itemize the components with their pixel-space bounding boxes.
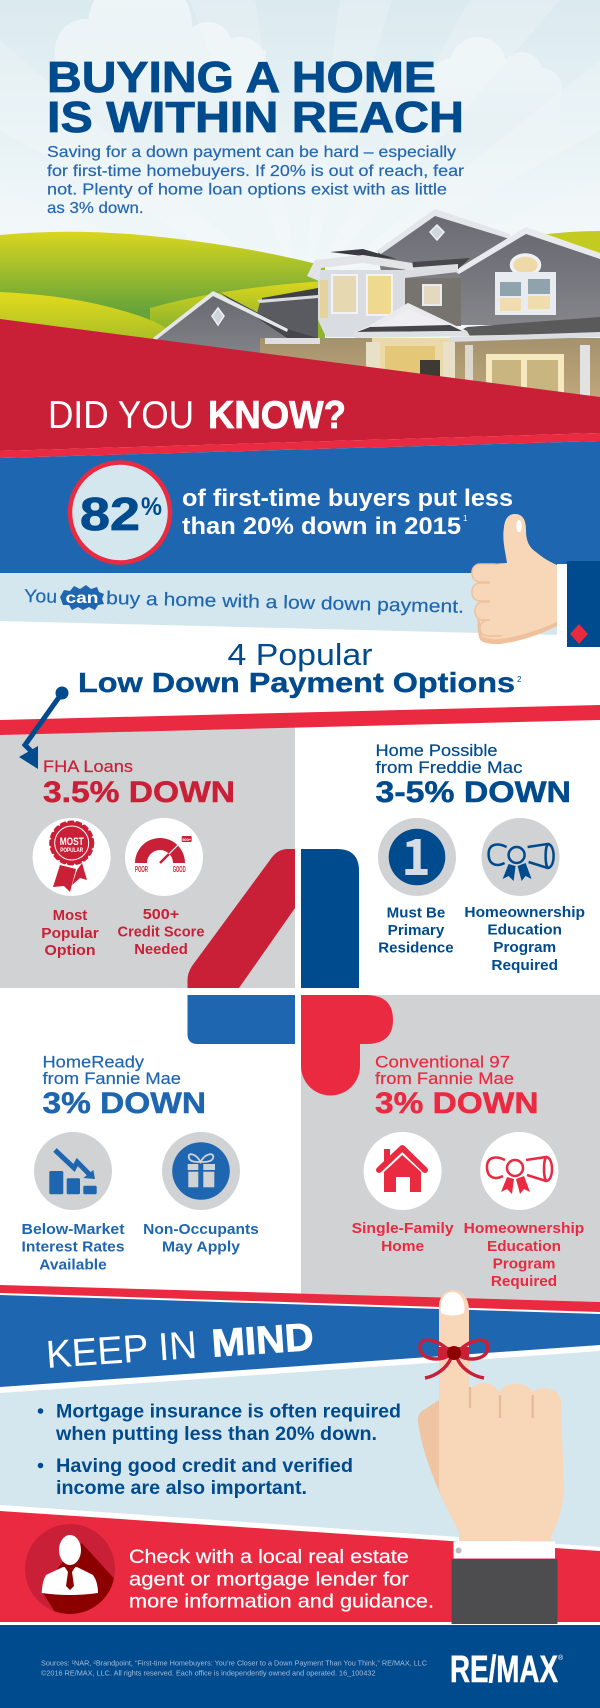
small window [423,285,441,305]
sleeve [567,561,600,647]
intro text: not. Plenty of home loan options exist with as little [47,182,447,198]
footer band [0,1625,600,1708]
callout text: agent or mortgage lender for [129,1570,409,1591]
label: 500+ credit score needed: Credit Score [118,924,204,940]
tagline text: You [24,585,57,607]
RE/MAX logo: ® [558,1654,564,1662]
label: homeownership education: Required [491,957,558,974]
red banner shape [0,319,600,451]
clouds [55,0,560,80]
callout text: more information and guidance. [129,1592,434,1613]
intro text: as 3% down. [47,200,144,217]
bullet list: Having good credit and verified [56,1456,353,1477]
label: single-family home: Single-Family [352,1220,454,1237]
label: homeownership education: Homeownership [464,904,585,921]
stat circle: 82%: 82 [80,488,140,540]
porch roof [450,317,600,336]
panel: home possible [376,741,585,974]
panel: home possible: 3-5% DOWN [376,776,571,809]
hills [0,231,600,345]
finger lobes [472,564,506,636]
stat circle: 82% [70,462,170,562]
label: homeownership education [464,1220,584,1290]
bullet list [38,1402,401,1499]
RE/MAX logo: RE/MAX [450,1649,558,1691]
label: homeownership education: Program [493,939,556,956]
label: 500+ credit score needed: Needed [134,941,188,958]
panel: homeready: from Fannie Mae [42,1069,181,1088]
left wing [250,288,318,340]
icon: falling rates chart [34,1132,112,1210]
label: single-family home [352,1220,454,1255]
hand shadow [477,570,557,644]
intro text: for first-time homebuyers. If 20% is out of reach, fear [47,163,465,180]
icon: credit score gauge: POOR [135,865,148,874]
footer sources text: ©2016 RE/MAX, LLC. All rights reserved. Each office is independently owned and operated. 16_100432 [41,1668,376,1678]
keep in mind section [0,1285,600,1625]
icon: number one [378,818,456,896]
can burst: can [66,590,98,607]
panel: homeready [22,1052,259,1273]
label: most popular option [41,907,99,959]
label: single-family home: Home [381,1238,424,1255]
cuff [557,564,567,639]
label: homeownership education: Program [493,1256,555,1273]
did you know banner [0,319,600,458]
heading: Home Possible [376,741,498,760]
panel: FHA loans: 3.5% DOWN [43,776,235,809]
thumb highlight [516,520,522,532]
label: must be primary residence [378,904,454,956]
label: must be primary residence: Primary [388,922,445,939]
label: below-market interest rates: Available [39,1256,107,1273]
icon: credit score gauge: 500+ [182,837,192,842]
title: IS WITHIN REACH [47,93,464,142]
callout text [129,1547,434,1613]
thumb shade [418,1400,480,1541]
label: must be primary residence: Must Be [387,904,445,922]
panel: conventional 97: 3% DOWN [375,1087,538,1120]
icon: gift [162,1132,240,1210]
icon: diploma [482,818,560,896]
label: most popular option: Option [44,942,96,959]
heading: keep in mind [45,1316,315,1377]
footer sources text [41,1658,428,1678]
icon: diploma [480,1132,558,1210]
label: homeownership education: Required [491,1273,557,1290]
label: non-occupants may apply: May Apply [162,1239,241,1256]
label: non-occupants may apply [143,1221,259,1256]
icon: most popular ribbon: POPULAR [60,848,84,854]
arrow pointing to FHA [19,686,68,769]
lower left gable [158,296,290,360]
footer sources text: Sources: ¹NAR, ²Brandpoint, “First-time Homebuyers: You’re Closer to a Down Payment Than You Think,” RE/MAX, LLC [41,1658,428,1668]
panel: conventional background [301,995,600,1305]
section heading: 4 popular options: 4 Popular [228,638,372,672]
panel: FHA loans [33,757,235,959]
label: 500+ credit score needed [118,906,204,958]
arched window [495,255,556,315]
tagline text: buy a home with a low down payment. [106,587,464,617]
can burst [60,585,104,610]
icon: number one: 1 [401,818,431,890]
section heading: 4 popular options: Low Down Payment Options [78,667,515,698]
center wall [405,278,461,326]
icon: single-family house [364,1132,442,1210]
bullet list: Mortgage insurance is often required [56,1402,401,1422]
label: homeownership education [464,904,585,974]
label: below-market interest rates [22,1221,124,1273]
section heading: 4 popular options: 2 [517,675,522,684]
heading: HomeReady [42,1052,145,1072]
stat text: of first-time buyers put less [182,485,513,512]
knuckle lines [470,1387,533,1418]
cuff [454,1542,555,1558]
stat text [182,485,513,540]
label: below-market interest rates: Below-Market [22,1221,124,1238]
light blue tagline band [0,573,600,636]
icon: agent silhouette [25,1524,115,1614]
blue statistic band [0,441,600,573]
background bands [0,1285,600,1625]
icon: most popular ribbon: MOST [60,836,84,848]
upper gable [378,212,520,300]
heading: did you know: DID YOU [48,394,194,437]
thumbs up hand [472,514,600,647]
heading: keep in mind: KEEP IN [45,1324,198,1377]
sleeve [452,1559,558,1624]
section heading: 4 popular options [78,638,522,698]
heading: keep in mind: MIND [210,1316,315,1366]
intro text: Saving for a down payment can be hard – especially [47,144,456,161]
fingernail [441,1292,464,1316]
heading: FHA Loans [43,757,133,776]
diamond [570,624,588,644]
panel: homeready: 3% DOWN [42,1087,206,1120]
title: BUYING A HOME [47,53,436,102]
cuff button [456,1548,462,1554]
tagline text [24,585,464,617]
label: homeownership education: Education [487,1238,561,1255]
hand [439,1290,564,1541]
label: most popular option: Most [53,907,87,924]
entry and porch [372,338,450,403]
bright red stripe [0,433,600,458]
label: must be primary residence: Residence [378,940,454,956]
bay window [318,270,405,337]
label: 500+ credit score needed: 500+ [143,906,179,923]
hero background: sky [0,0,600,340]
red divider stripe [0,705,600,735]
panel: home possible: from Freddie Mac [376,758,523,777]
panel: FHA background [0,725,295,988]
bullet list: when putting less than 20% down. [55,1424,377,1445]
intro text [47,144,465,217]
stat text: than 20% down in 2015 [182,513,461,540]
large number 4 logo [188,849,393,1096]
heading: Conventional 97 [375,1052,510,1072]
stat text: 1 [463,514,468,523]
ribbon bow [420,1340,488,1378]
panel: conventional 97: from Fannie Mae [375,1069,514,1088]
lower storey [260,338,600,410]
did you know banner: KNOW? [208,394,346,437]
hand [476,514,557,639]
label: non-occupants may apply: Non-Occupants [143,1221,259,1238]
right gable wall [458,232,600,325]
icon: most popular ribbon [33,818,111,896]
callout text: Check with a local real estate [129,1547,409,1568]
stat circle: 82%: % [141,493,162,521]
icon: credit score gauge [125,818,203,896]
title [47,53,464,142]
pointing hand with ribbon [418,1290,564,1624]
panel: conventional 97 [352,1052,584,1290]
bullet list: income are also important. [56,1478,307,1499]
label: homeownership education: Homeownership [464,1220,584,1237]
house photo illustration [153,209,600,410]
icon: credit score gauge: GOOD [173,865,186,874]
label: most popular option: Popular [41,925,99,942]
label: below-market interest rates: Interest Rates [22,1239,124,1256]
label: homeownership education: Education [487,922,562,938]
